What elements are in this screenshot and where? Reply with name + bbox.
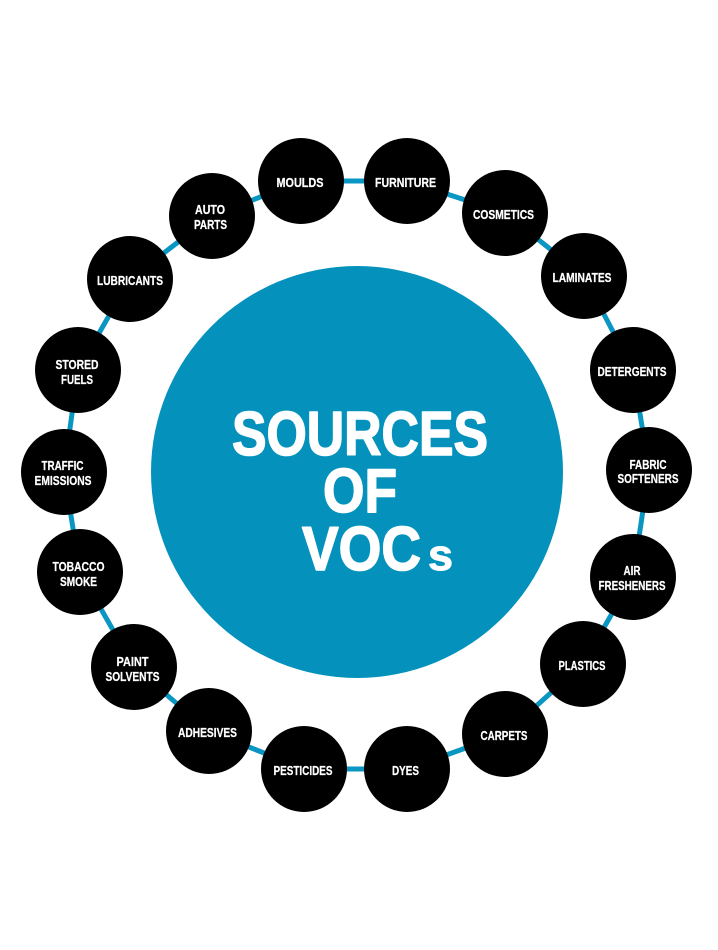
node: paint solvents: SOLVENTS [106,670,160,684]
node: laminates [541,233,627,319]
title: VOC [302,515,421,584]
node: moulds: MOULDS [276,176,324,190]
node: detergents [590,327,676,413]
node: fabric softeners [606,427,692,513]
node: lubricants: LUBRICANTS [97,274,163,288]
node: traffic emissions: EMISSIONS [34,474,92,488]
node: laminates: LAMINATES [552,271,612,285]
node: traffic emissions: TRAFFIC [42,459,84,473]
node: stored fuels: FUELS [61,373,93,387]
node: air fresheners: FRESHENERS [598,579,666,593]
title: s [428,531,453,580]
node: stored fuels [35,327,121,413]
node: paint solvents: PAINT [116,655,149,669]
central circle [151,266,563,678]
node: air fresheners [590,534,676,620]
node: auto parts: PARTS [194,218,227,232]
node: auto parts [169,173,255,259]
node: dyes: DYES [392,764,419,778]
connecting ring [64,181,649,769]
node: adhesives: ADHESIVES [178,726,237,740]
node: tobacco smoke [37,529,123,615]
node: plastics: PLASTICS [558,659,606,673]
node: stored fuels: STORED [56,358,98,372]
node: cosmetics: COSMETICS [473,208,534,222]
title: OF [323,457,397,526]
node: carpets [462,691,548,777]
node: tobacco smoke: SMOKE [60,575,97,589]
node: carpets: CARPETS [480,729,528,743]
node: auto parts: AUTO [195,203,225,217]
node: fabric softeners: SOFTENERS [618,472,678,486]
node: moulds [258,138,344,224]
node: furniture [364,138,450,224]
title: SOURCES [232,400,488,469]
title [232,400,488,584]
node: traffic emissions [21,429,107,515]
node: fabric softeners: FABRIC [630,458,666,472]
node: lubricants [87,236,173,322]
node: plastics [540,621,626,707]
node: cosmetics [462,170,548,256]
node: pesticides [261,726,347,812]
node: tobacco smoke: TOBACCO [52,560,105,574]
node: air fresheners: AIR [624,564,640,578]
node: detergents: DETERGENTS [598,365,666,379]
node: paint solvents [91,624,177,710]
node: pesticides: PESTICIDES [274,764,332,778]
node: dyes [364,726,450,812]
node: furniture: FURNITURE [375,176,436,190]
node: adhesives [166,688,252,774]
